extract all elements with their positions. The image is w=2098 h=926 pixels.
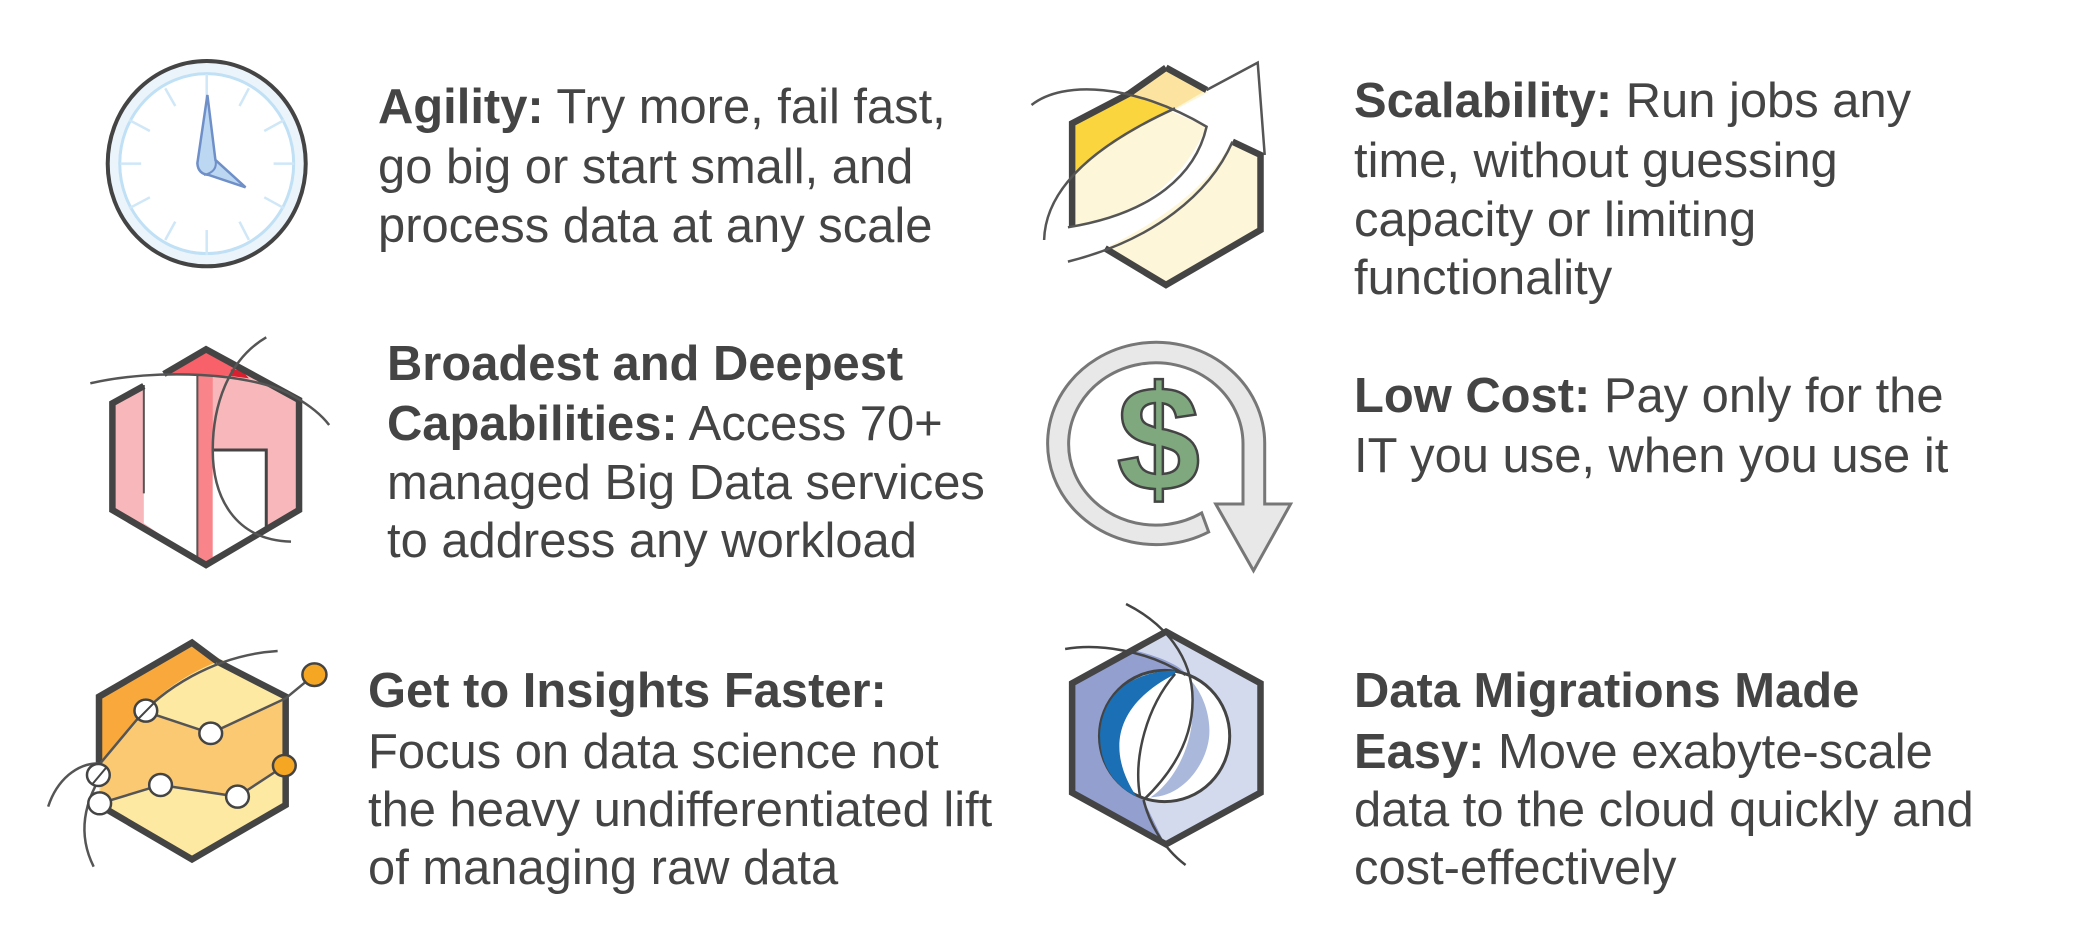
icon: clock xyxy=(108,61,306,266)
text: insights: of managing raw data xyxy=(368,841,839,895)
text: low cost: IT you use, when you use it xyxy=(1354,429,1949,483)
icon: low cost dollar arrow: $ xyxy=(1117,354,1200,522)
text: low cost: Low Cost: Pay only for the xyxy=(1354,369,1944,423)
text: data migrations: Data Migrations Made xyxy=(1354,664,1859,718)
text: agility: process data at any scale xyxy=(378,199,932,253)
text: broadest and deepest: Broadest and Deepest xyxy=(387,337,903,391)
text: scalability: time, without guessing xyxy=(1354,134,1838,188)
text: insights: Focus on data science not xyxy=(368,725,939,779)
text: broadest and deepest: to address any workload xyxy=(387,514,917,568)
text: agility: Agility: Try more, fail fast, xyxy=(378,80,946,134)
icon: low cost dollar arrow xyxy=(1048,342,1291,571)
text: data migrations: cost-effectively xyxy=(1354,841,1677,895)
text: broadest and deepest: Capabilities: Access 70+ xyxy=(387,397,943,451)
text: insights: the heavy undifferentiated lift xyxy=(368,783,993,837)
text: broadest and deepest xyxy=(387,337,985,568)
text: low cost xyxy=(1354,369,1949,483)
text: scalability: capacity or limiting xyxy=(1354,193,1756,247)
text: insights: Get to Insights Faster: xyxy=(368,664,887,718)
text: broadest and deepest: managed Big Data services xyxy=(387,456,985,510)
icon: scalability arrow hexagon xyxy=(1032,63,1265,285)
text: agility: go big or start small, and xyxy=(378,140,913,194)
text: scalability: Scalability: Run jobs any xyxy=(1354,74,1912,128)
text: scalability xyxy=(1354,74,1912,305)
text: data migrations: Easy: Move exabyte-scale xyxy=(1354,725,1933,779)
text: data migrations xyxy=(1354,664,1974,895)
text: scalability: functionality xyxy=(1354,251,1613,305)
text: data migrations: data to the cloud quickly and xyxy=(1354,783,1974,837)
text: insights xyxy=(368,664,993,895)
icon: data migration globe hexagon xyxy=(1065,604,1261,865)
icon: insights hexagon xyxy=(48,643,326,867)
icon: broadest hexagon xyxy=(90,337,329,565)
text: agility xyxy=(378,80,946,253)
